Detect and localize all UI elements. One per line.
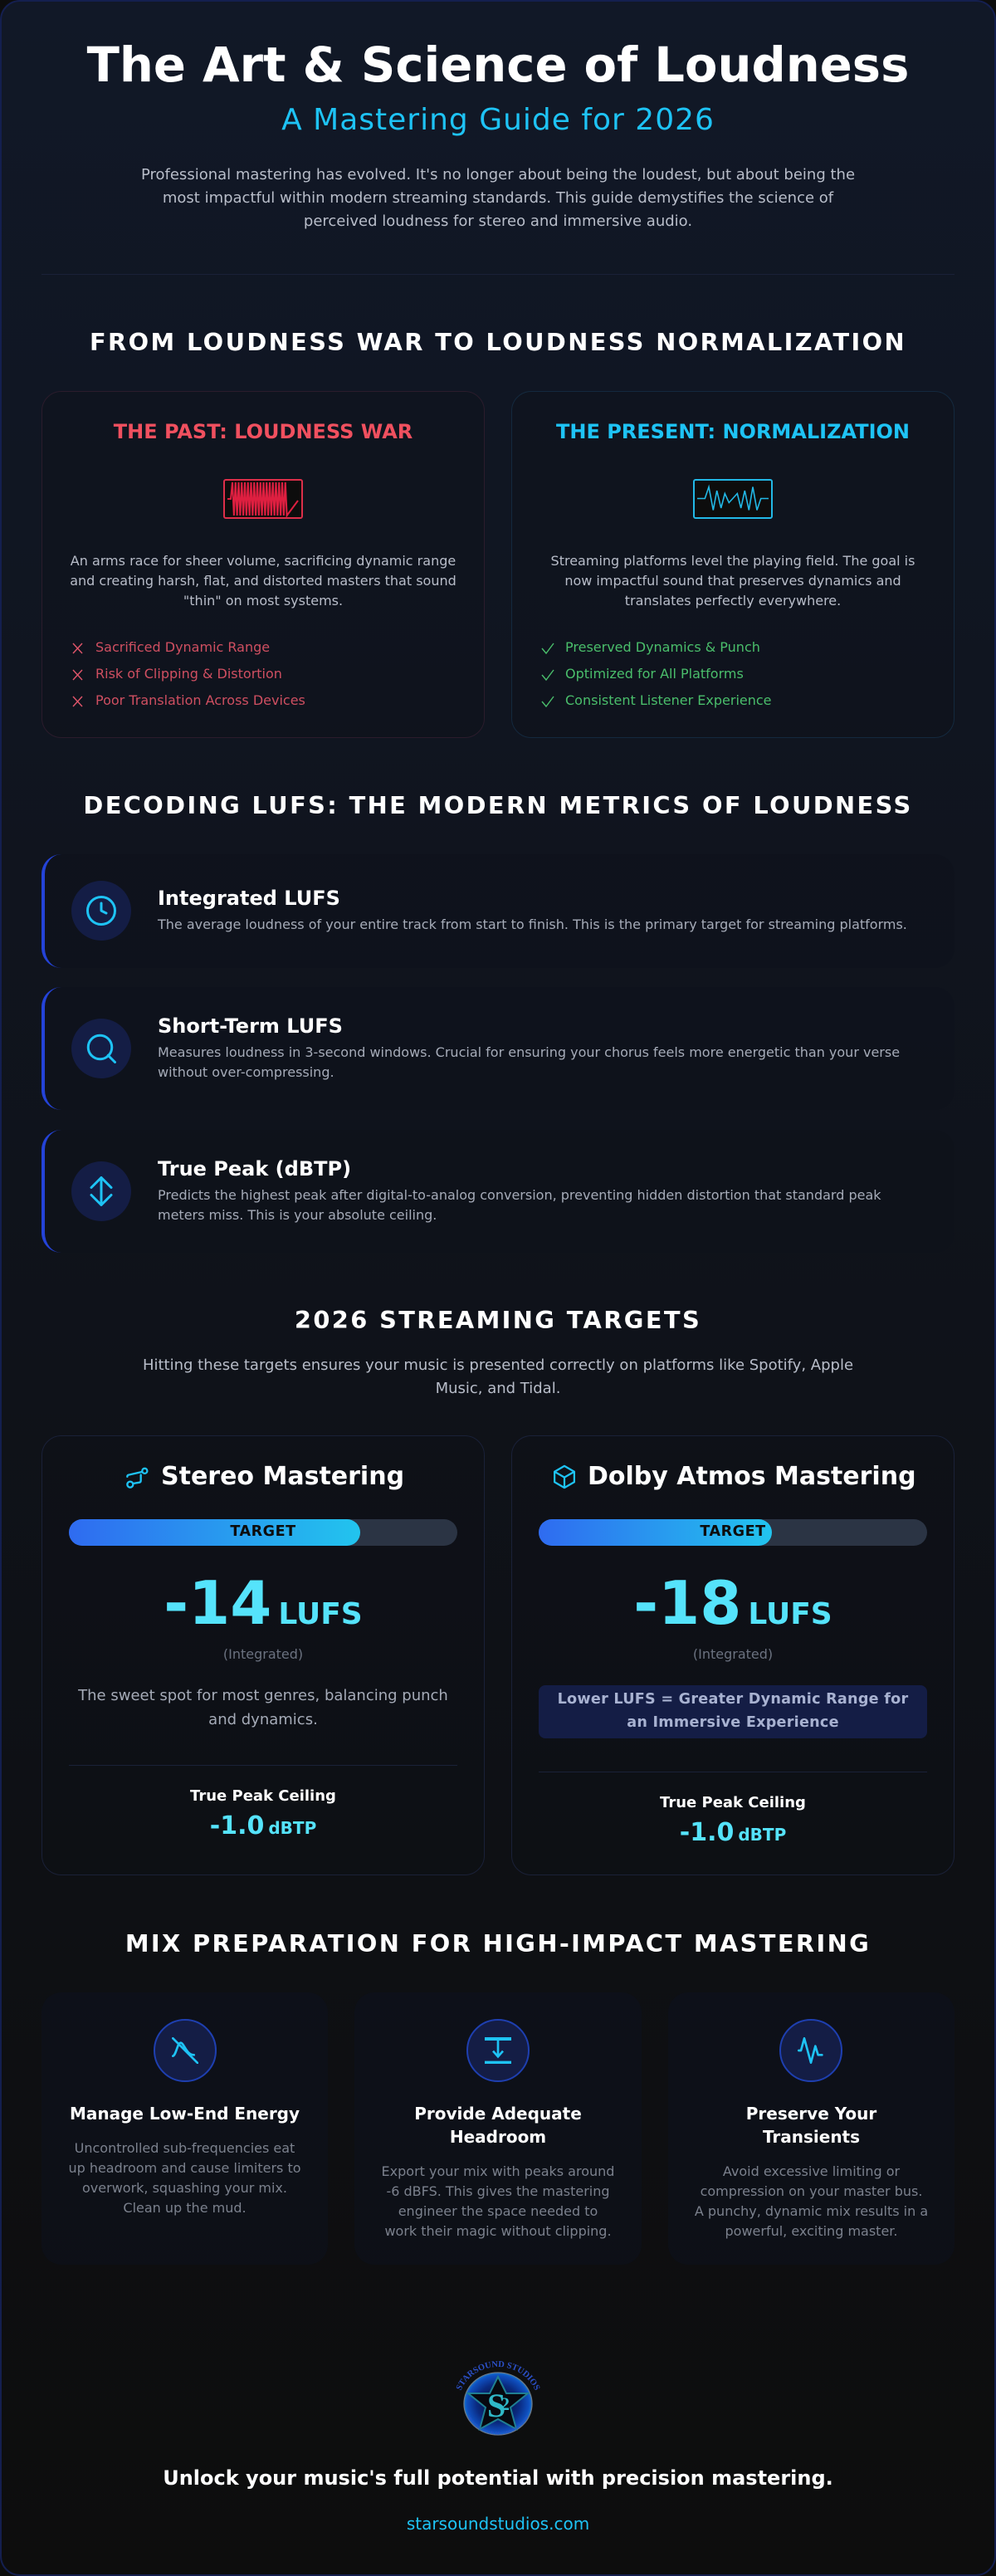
icon: clock bbox=[71, 881, 131, 941]
atmos ceiling value: -1.0dBTP bbox=[680, 1818, 786, 1847]
panel: low-end energy bbox=[42, 1992, 328, 2265]
present description: translates perfectly everywhere. bbox=[625, 593, 841, 609]
atmos callout: an Immersive Experience bbox=[627, 1714, 839, 1731]
heading: streaming targets: 2026 STREAMING TARGETS bbox=[295, 1306, 701, 1334]
true peak text bbox=[158, 1187, 881, 1223]
targets intro: Hitting these targets ensures your music is presented correctly on platforms like Spotify, Apple bbox=[143, 1356, 853, 1374]
short-term title: Short-Term LUFS bbox=[158, 1014, 343, 1038]
headroom text: -6 dBFS. This gives the mastering bbox=[386, 2183, 610, 2199]
panel: the present bbox=[511, 391, 954, 738]
present description bbox=[551, 553, 915, 609]
past list bbox=[73, 639, 305, 708]
transients text: Avoid excessive limiting or bbox=[723, 2163, 900, 2179]
panel: short-term lufs bbox=[42, 987, 954, 1110]
stereo target bar: TARGET bbox=[230, 1523, 296, 1540]
footer link: starsoundstudios.com bbox=[407, 2514, 589, 2534]
panel: dolby atmos mastering bbox=[511, 1435, 954, 1875]
atmos callout bbox=[539, 1685, 927, 1738]
intro text: perceived loudness for stereo and immersive audio. bbox=[304, 213, 692, 230]
intro text: Professional mastering has evolved. It's no longer about being the loudest, but about being the bbox=[141, 166, 855, 183]
title: The Art & Science of Loudness bbox=[87, 37, 909, 93]
present description: now impactful sound that preserves dynamics and bbox=[564, 573, 901, 589]
stereo ceiling value: -1.0dBTP bbox=[210, 1811, 316, 1840]
transients text: powerful, exciting master. bbox=[725, 2223, 897, 2239]
present list bbox=[541, 639, 772, 708]
atmos value: -18LUFS bbox=[633, 1568, 832, 1638]
icon: dynamic waveform bbox=[693, 479, 773, 519]
targets intro: Music, and Tidal. bbox=[436, 1380, 560, 1397]
stereo ceiling label: True Peak Ceiling bbox=[190, 1787, 336, 1805]
headroom title bbox=[414, 2104, 582, 2147]
icon: crushed waveform bbox=[223, 479, 303, 519]
stereo integrated label: (Integrated) bbox=[223, 1646, 303, 1662]
transients title: Transients bbox=[763, 2127, 860, 2147]
logo: starsound studios: 2 bbox=[500, 2393, 510, 2414]
panel: transients bbox=[668, 1992, 954, 2265]
item: clipping: Risk of Clipping & Distortion bbox=[95, 666, 282, 682]
true peak text: Predicts the highest peak after digital-to-analog conversion, preventing hidden distortion that standard peak bbox=[158, 1187, 881, 1203]
short-term text bbox=[158, 1044, 900, 1080]
true peak text: meters miss. This is your absolute ceiling. bbox=[158, 1207, 437, 1223]
icon: headroom bbox=[466, 2019, 530, 2082]
stereo heading bbox=[126, 1462, 404, 1491]
atmos ceiling label: True Peak Ceiling bbox=[660, 1794, 806, 1811]
atmos target bar bbox=[539, 1519, 927, 1546]
footer call to action: Unlock your music's full potential with precision mastering. bbox=[163, 2466, 833, 2490]
low-end text: Clean up the mud. bbox=[123, 2200, 247, 2216]
short-term text: Measures loudness in 3-second windows. Crucial for ensuring your chorus feels more energetic than your verse bbox=[158, 1044, 900, 1060]
present description: Streaming platforms level the playing field. The goal is bbox=[551, 553, 915, 569]
icon: peak arrows bbox=[71, 1161, 131, 1221]
item: sacrificed dynamic range: Sacrificed Dynamic Range bbox=[95, 639, 270, 655]
low-end text: up headroom and cause limiters to bbox=[68, 2160, 301, 2176]
atmos integrated label: (Integrated) bbox=[693, 1646, 773, 1662]
transients text bbox=[695, 2163, 928, 2239]
atmos heading bbox=[554, 1462, 916, 1491]
icon: cube bbox=[554, 1464, 575, 1489]
headroom title: Provide Adequate bbox=[414, 2104, 582, 2124]
icon: transients bbox=[779, 2019, 842, 2082]
integrated lufs title: Integrated LUFS bbox=[158, 887, 340, 910]
icon: magnifier bbox=[71, 1019, 131, 1078]
past heading: THE PAST: LOUDNESS WAR bbox=[114, 420, 413, 443]
headroom text bbox=[382, 2163, 614, 2239]
logo: starsound studios: S bbox=[487, 2387, 505, 2424]
stereo value: -14LUFS bbox=[164, 1568, 363, 1638]
stereo title: Stereo Mastering bbox=[161, 1462, 404, 1491]
heading: mix preparation: MIX PREPARATION FOR HIGH-IMPACT MASTERING bbox=[125, 1929, 871, 1958]
panel: headroom bbox=[354, 1992, 642, 2265]
logo: starsound studios bbox=[456, 2361, 540, 2436]
panel: the past bbox=[42, 391, 485, 738]
stereo target bar bbox=[69, 1519, 457, 1546]
atmos title: Dolby Atmos Mastering bbox=[588, 1462, 916, 1491]
item: consistent: Consistent Listener Experience bbox=[565, 692, 772, 708]
past description bbox=[70, 553, 456, 609]
headroom text: work their magic without clipping. bbox=[384, 2223, 612, 2239]
past description: and creating harsh, flat, and distorted masters that sound bbox=[70, 573, 456, 589]
transients title: Preserve Your bbox=[746, 2104, 876, 2124]
integrated lufs text: The average loudness of your entire track from start to finish. This is the primary target for streaming platforms. bbox=[158, 917, 907, 932]
stereo note: The sweet spot for most genres, balancing punch bbox=[78, 1687, 448, 1704]
low-end text: overwork, squashing your mix. bbox=[82, 2180, 287, 2196]
headroom title: Headroom bbox=[450, 2127, 546, 2147]
logo: starsound studios: STARSOUND STUDIOS bbox=[456, 2361, 540, 2391]
low-end title: Manage Low-End Energy bbox=[70, 2104, 300, 2124]
short-term text: without over-compressing. bbox=[158, 1064, 334, 1080]
icon: low-end bbox=[154, 2019, 217, 2082]
logo: starsound studios: MEETING YOUR RECORDING NEEDS bbox=[467, 2415, 528, 2435]
present heading: THE PRESENT: NORMALIZATION bbox=[556, 420, 910, 443]
stereo note: and dynamics. bbox=[208, 1711, 318, 1728]
panel: true peak bbox=[42, 1130, 954, 1253]
past description: "thin" on most systems. bbox=[183, 593, 343, 609]
panel: stereo mastering bbox=[42, 1435, 485, 1875]
item: poor translation: Poor Translation Across Devices bbox=[95, 692, 305, 708]
low-end text: Uncontrolled sub-frequencies eat bbox=[75, 2140, 295, 2156]
headroom text: engineer the space needed to bbox=[398, 2203, 598, 2219]
panel: integrated lufs bbox=[42, 854, 954, 968]
intro text bbox=[141, 166, 855, 230]
heading: loudness war to normalization: FROM LOUDNESS WAR TO LOUDNESS NORMALIZATION bbox=[90, 328, 906, 356]
true peak title: True Peak (dBTP) bbox=[158, 1157, 351, 1180]
stereo note bbox=[78, 1687, 448, 1728]
transients text: A punchy, dynamic mix results in a bbox=[695, 2203, 928, 2219]
intro text: most impactful within modern streaming standards. This guide demystifies the science of bbox=[163, 189, 833, 207]
subtitle: A Mastering Guide for 2026 bbox=[281, 103, 715, 137]
icon: stereo route bbox=[126, 1468, 148, 1488]
headroom text: Export your mix with peaks around bbox=[382, 2163, 614, 2179]
past description: An arms race for sheer volume, sacrificing dynamic range bbox=[71, 553, 456, 569]
item: preserved dynamics: Preserved Dynamics & Punch bbox=[565, 639, 760, 655]
heading: decoding lufs: DECODING LUFS: THE MODERN METRICS OF LOUDNESS bbox=[83, 791, 913, 819]
item: optimized: Optimized for All Platforms bbox=[565, 666, 744, 682]
targets intro bbox=[143, 1356, 853, 1397]
transients text: compression on your master bus. bbox=[701, 2183, 922, 2199]
atmos callout: Lower LUFS = Greater Dynamic Range for bbox=[558, 1691, 908, 1708]
low-end text bbox=[68, 2140, 301, 2216]
atmos target bar: TARGET bbox=[700, 1523, 766, 1540]
transients title bbox=[746, 2104, 876, 2147]
